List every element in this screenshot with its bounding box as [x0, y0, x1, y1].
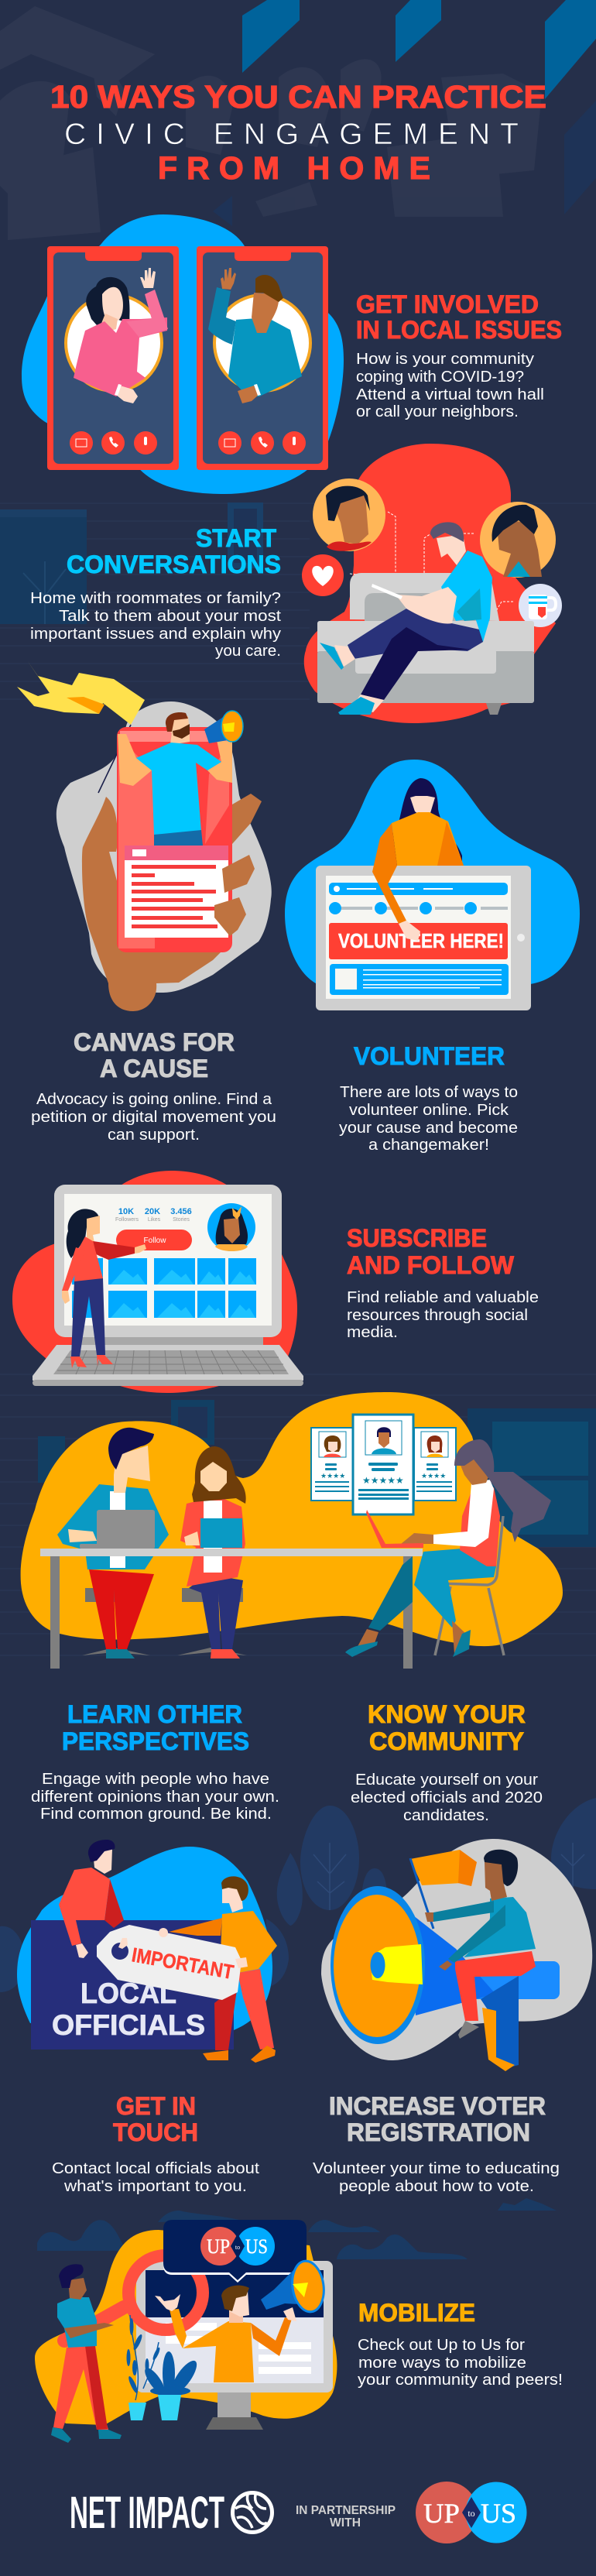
- man reading: [320, 522, 492, 715]
- text block: elected officials and 2020: [351, 1789, 543, 1806]
- logo: net impact: NET IMPACT: [70, 2488, 224, 2538]
- panel: get involved in local issues: [22, 214, 562, 494]
- background: dark banner shapes: [213, 101, 596, 226]
- man with magnifying glass: [51, 2264, 122, 2443]
- icon: tea mug: [519, 584, 562, 627]
- text block: Find common ground. Be kind.: [40, 1806, 272, 1823]
- plants: [127, 2315, 201, 2420]
- heading: TOUCH: [113, 2118, 198, 2146]
- man on screen with megaphone: [155, 2259, 327, 2382]
- meeting table: [40, 1549, 423, 1669]
- panel: get in touch: [17, 1840, 277, 2195]
- heading: VOLUNTEER: [354, 1042, 505, 1070]
- panel: volunteer: [285, 760, 580, 1154]
- person: woman with tablet: [177, 1446, 247, 1658]
- speech bubble with logo: UP: [207, 2235, 230, 2258]
- person: man with laptop: [57, 1428, 169, 1658]
- text block: what's important to you.: [63, 2178, 247, 2195]
- text block: [356, 351, 544, 420]
- title: FROM HOME: [158, 150, 430, 186]
- heading: IN LOCAL ISSUES: [356, 316, 562, 344]
- text block: Check out Up to Us for: [358, 2337, 525, 2354]
- text block: people about how to vote.: [339, 2178, 534, 2195]
- megaphone: [331, 1886, 495, 2044]
- gray blob: [57, 701, 272, 993]
- title: [50, 79, 546, 186]
- avatar: friend right: [480, 502, 556, 578]
- heading: PERSPECTIVES: [62, 1727, 249, 1755]
- heading: [368, 1700, 526, 1755]
- text block: candidates.: [403, 1807, 489, 1824]
- text block: There are lots of ways to: [340, 1084, 518, 1101]
- local officials sign: [31, 1920, 234, 2049]
- man in red: [59, 1840, 124, 1958]
- panel: mobilize: [35, 2220, 563, 2443]
- speech bubble with logo: US: [245, 2235, 268, 2258]
- person: woman on laptop: [345, 1439, 551, 1657]
- candidate cards: ★★★★: [320, 1472, 345, 1480]
- background: faded crowd behind title: [0, 6, 542, 240]
- candidate cards: ★★★★★: [362, 1475, 404, 1486]
- background: house behind meeting scene: [38, 1400, 596, 1547]
- tablet: VOLUNTEER HERE!: [338, 929, 504, 952]
- text block: different opinions than your own.: [31, 1789, 279, 1806]
- text block: Contact local officials about: [52, 2160, 259, 2177]
- text block: petition or digital movement you: [31, 1109, 276, 1126]
- text block: Engage with people who have: [42, 1771, 269, 1788]
- document on phone: [125, 846, 228, 938]
- barrel of megaphone: [471, 1961, 560, 1999]
- background: blue banners at top: [242, 0, 596, 99]
- avatar: friend left: [313, 478, 385, 551]
- person with flag: [410, 1850, 536, 2071]
- red blob: [304, 444, 556, 723]
- heading: SUBSCRIBE: [347, 1224, 487, 1252]
- logo: up to us: to: [468, 2508, 475, 2519]
- social stats: 20K: [145, 1207, 160, 1216]
- heading: [113, 2092, 198, 2146]
- laptop: [33, 1185, 303, 1386]
- heading: [347, 1224, 515, 1279]
- partnership label: IN PARTNERSHIP: [296, 2504, 396, 2517]
- text block: can support.: [108, 1127, 200, 1144]
- heading: [62, 1700, 249, 1755]
- panel: start conversations: [30, 444, 562, 723]
- text block: you care.: [215, 643, 281, 660]
- background: trees: [0, 1798, 596, 1992]
- man in orange: [169, 1876, 277, 2063]
- blue blob: [285, 760, 580, 985]
- speech bubble with logo: [163, 2220, 307, 2283]
- woman pointing: [62, 1209, 146, 1368]
- follow button: [116, 1230, 192, 1250]
- monitor: [136, 2261, 333, 2430]
- heading: START: [196, 524, 276, 552]
- logo: up to us: UP: [423, 2498, 460, 2529]
- flag: [17, 660, 145, 793]
- heading: A CAUSE: [100, 1055, 208, 1082]
- woman hair and sweater: [378, 778, 464, 867]
- text block: [30, 590, 281, 660]
- blue blob: [17, 1847, 272, 2030]
- heading: AND FOLLOW: [347, 1251, 515, 1279]
- background: clouds: [37, 2198, 557, 2259]
- text block: [347, 1289, 539, 1341]
- text block: Volunteer your time to educating: [313, 2160, 560, 2177]
- sofa: [317, 573, 534, 715]
- important tag: IMPORTANT: [130, 1943, 235, 1984]
- text block: [358, 2337, 563, 2389]
- phone: [117, 727, 232, 952]
- local officials sign: OFFICIALS: [52, 2009, 205, 2041]
- social stats: [115, 1207, 192, 1223]
- tablet: [316, 866, 531, 1010]
- text block: Home with roommates or family?: [30, 590, 281, 607]
- social stats: 10K: [118, 1207, 134, 1216]
- candidate cards: [311, 1415, 456, 1514]
- text block: Talk to them about your most: [59, 608, 281, 625]
- social stats: 3.456: [170, 1207, 192, 1216]
- yellow blob: [21, 1392, 563, 1646]
- heading: [74, 1028, 235, 1082]
- heading: CONVERSATIONS: [67, 551, 281, 578]
- heading: COMMUNITY: [369, 1727, 524, 1755]
- partnership label: [296, 2504, 396, 2530]
- background: house window and door: [0, 503, 263, 624]
- text block: [313, 2160, 560, 2195]
- dashed connectors: [350, 512, 513, 615]
- text block: [339, 1084, 518, 1154]
- heading: GET INVOLVED: [356, 290, 539, 318]
- social stats: Followers: [115, 1217, 139, 1223]
- magnifying glass: [64, 2255, 203, 2341]
- heading: [67, 524, 281, 578]
- panel: increase voter registration: [313, 1839, 592, 2195]
- heading: INCREASE VOTER: [329, 2092, 546, 2120]
- title: 10 WAYS YOU CAN PRACTICE: [50, 79, 546, 115]
- local officials sign: LOCAL: [80, 1977, 176, 2009]
- heading: CANVAS FOR: [74, 1028, 235, 1056]
- partnership label: WITH: [330, 2516, 361, 2530]
- text block: your community and peers!: [358, 2372, 563, 2389]
- woman arm reaching over tablet: [372, 823, 420, 941]
- text block: coping with COVID-19?: [356, 369, 524, 386]
- heading: [356, 290, 562, 344]
- photo grid: [72, 1258, 256, 1318]
- text block: media.: [347, 1324, 398, 1341]
- hand back: [82, 797, 232, 1011]
- panel: know your community and learn other perspectives meeting scene: [21, 1392, 563, 1669]
- heading: KNOW YOUR: [368, 1700, 526, 1728]
- footer: logos: [70, 2482, 526, 2543]
- panel: canvas for a cause: [17, 660, 276, 1144]
- yellow blob: [35, 2230, 337, 2425]
- social stats: Stories: [173, 1217, 190, 1223]
- profile avatar: [207, 1203, 255, 1251]
- icon: megaphone: [204, 711, 243, 743]
- panel: subscribe and follow: [12, 1171, 539, 1393]
- phone: woman waving: [47, 246, 179, 470]
- icon: megaphone: [261, 2259, 327, 2321]
- blue blob: [22, 214, 344, 494]
- text block: or call your neighbors.: [356, 403, 519, 420]
- important tag: [97, 1925, 248, 2000]
- text block: your cause and become: [339, 1120, 518, 1137]
- text block: a changemaker!: [368, 1137, 489, 1154]
- title: CIVIC ENGAGEMENT: [64, 118, 519, 151]
- text block: Educate yourself on your: [355, 1772, 538, 1789]
- heading: LEARN OTHER: [67, 1700, 242, 1728]
- text block: How is your community: [356, 351, 534, 368]
- man with megaphone: [118, 711, 243, 846]
- gray blob: [321, 1839, 592, 2060]
- logo: up to us: US: [481, 2498, 516, 2529]
- text block: volunteer online. Pick: [349, 1102, 509, 1119]
- heading: MOBILIZE: [358, 2299, 475, 2327]
- logo: up to us: [416, 2482, 526, 2543]
- icon: heart: [302, 554, 344, 596]
- candidate cards: ★★★★: [421, 1472, 446, 1480]
- text block: Find reliable and valuable: [347, 1289, 539, 1306]
- follow button: Follow: [144, 1237, 166, 1245]
- heading: GET IN: [116, 2092, 196, 2120]
- social stats: Likes: [148, 1217, 161, 1223]
- heading: [329, 2092, 546, 2146]
- text block: Advocacy is going online. Find a: [36, 1091, 272, 1108]
- text block: [351, 1772, 543, 1824]
- speech bubble with logo: to: [235, 2244, 240, 2251]
- text block: [52, 2160, 259, 2195]
- red blob: [12, 1171, 297, 1393]
- text block: resources through social: [347, 1307, 528, 1324]
- heading: REGISTRATION: [347, 2118, 530, 2146]
- panel: learn other perspectives text: [31, 1700, 279, 1823]
- text block: important issues and explain why: [30, 626, 281, 643]
- phone: man waving: [197, 246, 328, 470]
- text block: [31, 1091, 276, 1144]
- text block: more ways to mobilize: [358, 2355, 526, 2372]
- text block: [31, 1771, 279, 1823]
- panel: know your community text: [351, 1700, 543, 1824]
- fingers: [214, 794, 262, 936]
- text block: Attend a virtual town hall: [356, 386, 544, 403]
